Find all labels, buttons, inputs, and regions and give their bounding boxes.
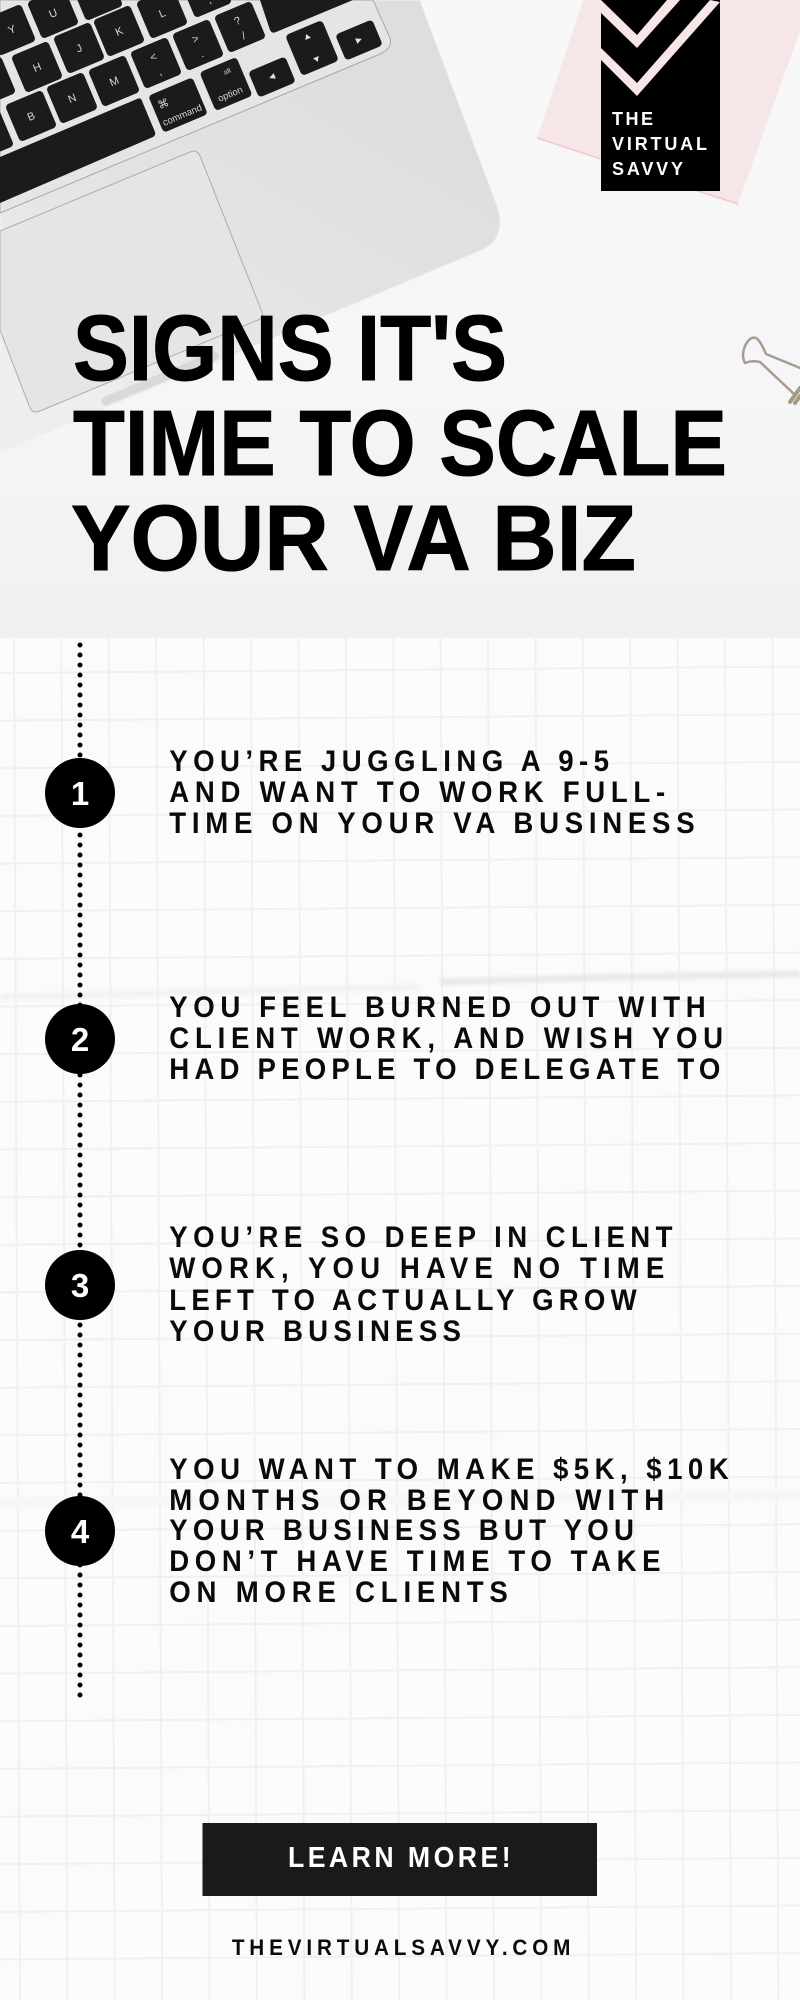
learn more button	[202, 1823, 597, 1896]
keyboard keys: L	[157, 7, 168, 21]
keyboard keys: K	[114, 25, 126, 39]
keyboard keys: ⌘	[156, 96, 171, 112]
trackpad	[0, 151, 262, 412]
title: SIGNS IT'S	[73, 296, 507, 400]
keyboard keys: N	[66, 92, 78, 106]
grid paper background	[0, 638, 800, 2000]
number badge 1	[45, 758, 115, 828]
keyboard keys: Y	[7, 23, 19, 37]
laptop	[0, 0, 500, 453]
logo wordmark: THE	[612, 109, 653, 129]
website url: THEVIRTUALSAVVY.COM	[232, 1934, 570, 1960]
learn more button: LEARN MORE!	[288, 1841, 511, 1873]
keyboard keys: /	[240, 30, 248, 42]
step 3 text: YOUR BUSINESS	[169, 1315, 461, 1348]
step 4 text: YOUR BUSINESS BUT YOU	[169, 1514, 634, 1547]
keyboard keys: alt	[223, 67, 232, 77]
step 3 text	[169, 1221, 673, 1348]
step 4 text: YOU WANT TO MAKE $5K, $10K	[169, 1453, 729, 1486]
binder clip	[743, 338, 800, 403]
hero photo background	[0, 0, 800, 638]
keyboard keys: ,	[156, 66, 164, 78]
keyboard keys: B	[26, 110, 37, 124]
keyboard keys	[0, 0, 383, 203]
step 1	[45, 745, 695, 840]
dotted timeline	[78, 645, 82, 1696]
logo wordmark: SAVVY	[612, 159, 683, 179]
number badge 4	[45, 1496, 115, 1566]
title: TIME TO SCALE	[73, 391, 727, 495]
number badge 3: 3	[71, 1267, 89, 1304]
step 3	[45, 1221, 673, 1348]
step 2 text: CLIENT WORK, AND WISH YOU	[169, 1022, 723, 1055]
keyboard keys: command	[161, 102, 204, 129]
step 1 text	[169, 745, 695, 840]
step 1 text: TIME ON YOUR VA BUSINESS	[169, 807, 695, 840]
number badge 3	[45, 1250, 115, 1320]
step 2	[45, 991, 723, 1086]
title	[71, 296, 727, 590]
step 2 text: HAD PEOPLE TO DELEGATE TO	[169, 1053, 720, 1086]
title: YOUR VA BIZ	[71, 486, 636, 590]
keyboard keys: M	[108, 75, 121, 89]
logo wordmark	[612, 109, 707, 179]
pink notepad	[537, 0, 800, 204]
logo wordmark: VIRTUAL	[612, 134, 707, 154]
keyboard keys: >	[190, 33, 201, 46]
number badge 2: 2	[71, 1021, 89, 1058]
step 4 text: ON MORE CLIENTS	[169, 1576, 508, 1609]
keyboard keys: option	[216, 85, 245, 105]
number badge 1: 1	[71, 775, 89, 812]
step 4 text: MONTHS OR BEYOND WITH	[169, 1484, 664, 1517]
keyboard keys: <	[148, 51, 159, 64]
number badge 4: 4	[71, 1513, 90, 1550]
step 2 text	[169, 991, 723, 1086]
step 1 text: YOU’RE JUGGLING A 9-5	[169, 745, 609, 778]
keyboard keys: ?	[233, 15, 243, 28]
keyboard keys: .	[198, 48, 206, 60]
step 3 text: YOU’RE SO DEEP IN CLIENT	[169, 1221, 673, 1254]
logo badge	[601, 0, 720, 191]
step 4 text: DON’T HAVE TIME TO TAKE	[169, 1545, 661, 1578]
step 4	[45, 1453, 729, 1609]
keyboard keys: H	[31, 61, 43, 75]
step 3 text: WORK, YOU HAVE NO TIME	[169, 1252, 664, 1285]
number badge 2	[45, 1004, 115, 1074]
keyboard keys: U	[47, 7, 59, 21]
step 2 text: YOU FEEL BURNED OUT WITH	[169, 991, 706, 1024]
step 4 text	[169, 1453, 729, 1609]
step 1 text: AND WANT TO WORK FULL-	[169, 776, 665, 809]
step 3 text: LEFT TO ACTUALLY GROW	[169, 1284, 637, 1317]
keyboard keys: J	[75, 42, 84, 56]
